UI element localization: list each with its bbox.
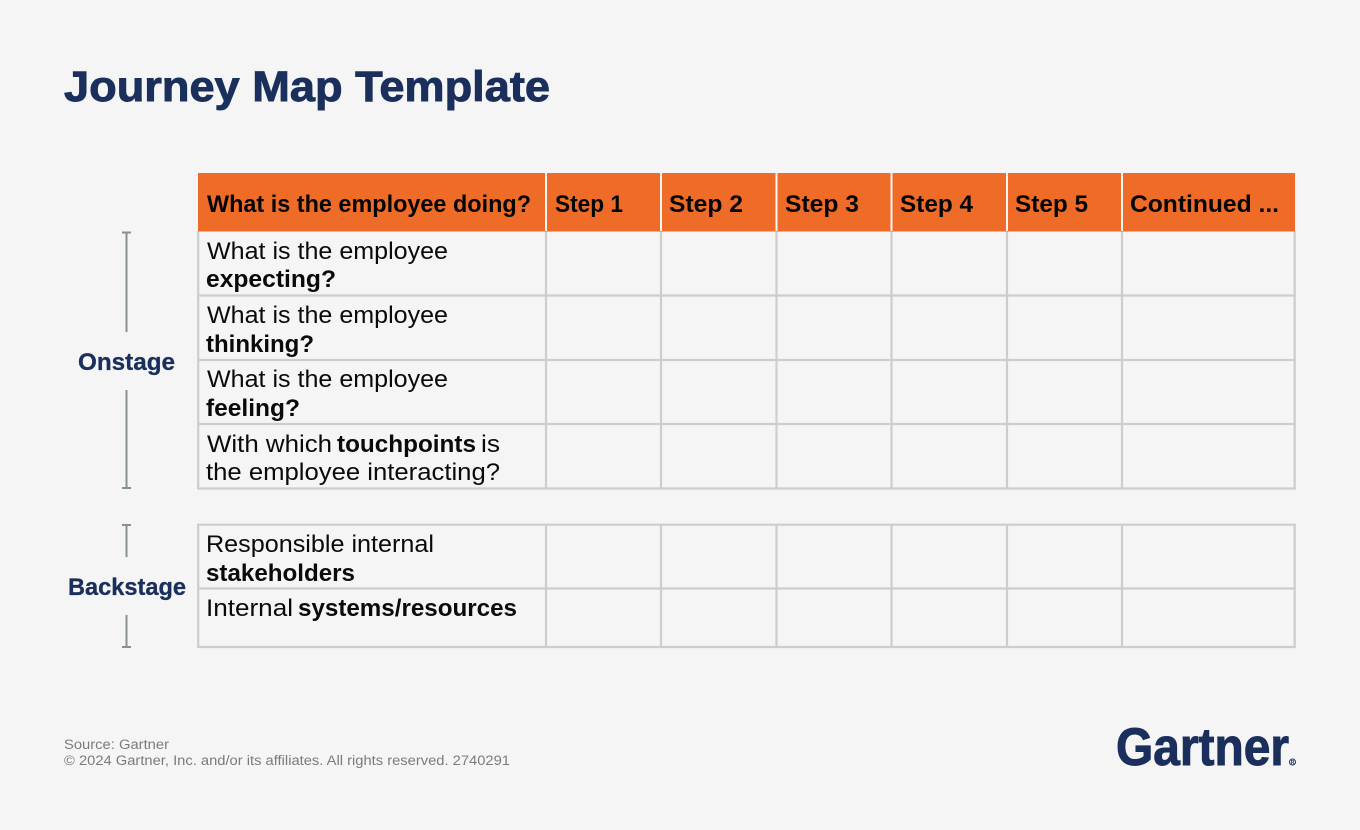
row: touchpoints: is [481,431,500,458]
row: touchpoints: With which [207,431,332,458]
source note [64,737,510,768]
header row: Step 1 [555,191,623,218]
row: feeling: What is the employee [207,366,448,393]
Gartner logo: Gartner [1116,718,1289,777]
row: stakeholders: stakeholders [206,560,355,587]
Gartner logo: R [1291,760,1295,766]
header row: Continued ... [1130,191,1279,218]
source note: © 2024 Gartner, Inc. and/or its affiliates. All rights reserved. 2740291 [64,753,510,768]
row: feeling [206,366,448,422]
row: thinking: What is the employee [207,302,448,329]
header row: What is the employee doing? [207,191,531,218]
row: touchpoints: touchpoints [337,431,476,458]
row: stakeholders: Responsible internal [206,531,434,558]
panel: backstage table [198,524,1295,647]
header row: Step 3 [785,191,859,218]
source note: Source: Gartner [64,737,170,752]
panel: onstage table [198,173,1295,488]
title: Journey Map Template [64,63,550,111]
row: expecting: expecting? [206,266,336,293]
row: systems: systems/resources [298,595,517,622]
row: touchpoints: the employee interacting? [206,459,500,486]
row: systems [206,595,517,622]
row: expecting: What is the employee [207,238,448,265]
row: thinking [206,302,448,358]
header row [198,173,1295,232]
row: expecting [206,238,448,293]
onstage label: Onstage [78,349,175,376]
row: systems: Internal [206,595,293,622]
row: thinking: thinking? [206,331,314,358]
row: feeling: feeling? [206,395,300,422]
row: stakeholders [206,531,434,587]
header row: Step 2 [669,191,743,218]
backstage label: Backstage [68,574,186,601]
backstage bracket [68,525,186,647]
row: touchpoints [206,431,500,486]
header row: Step 5 [1015,191,1088,218]
onstage bracket [78,232,175,488]
header row: Step 4 [900,191,974,218]
